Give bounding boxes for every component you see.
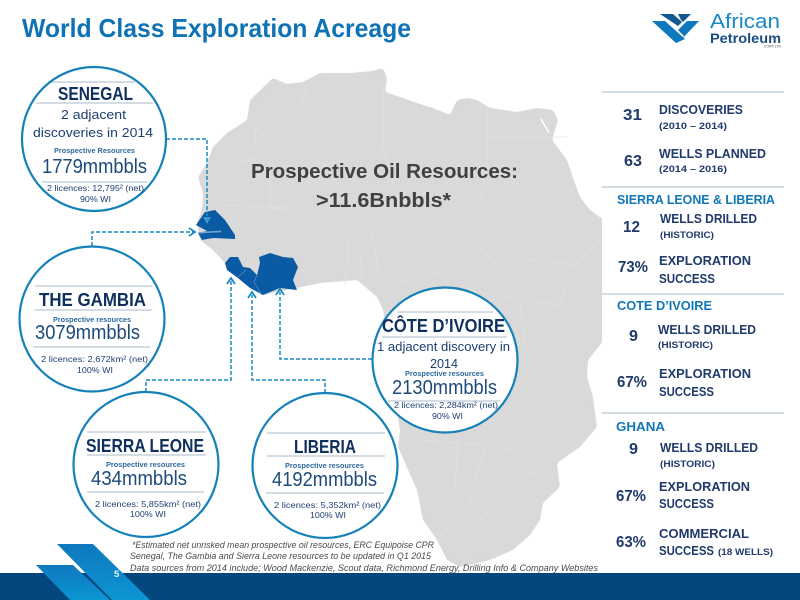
panel: The Gambia: 2 licences: 2,672km² (net) <box>41 354 148 364</box>
stat: Cote d'Ivoire wells drilled: 9 <box>629 328 638 345</box>
stat: Ghana wells drilled: WELLS DRILLED <box>660 440 758 455</box>
stat: Ghana exploration success: EXPLORATION <box>659 479 750 494</box>
panel: Cote d'Ivoire <box>372 288 518 432</box>
stat: Ghana commercial success: (18 WELLS) <box>718 547 773 558</box>
panel: Senegal: 1779mmbbls <box>42 156 147 178</box>
stat: Ghana wells drilled <box>629 440 758 470</box>
footnote: Data sources from 2014 include; Wood Mackenzie, Scout data, Richmond Energy, Drilling Info & Company Websites <box>130 563 599 573</box>
stat: Sierra Leone and Liberia wells drilled: 12 <box>623 219 640 236</box>
heading: Ghana: GHANA <box>616 419 666 434</box>
panel: Senegal: 90% WI <box>80 194 111 204</box>
headline: prospective oil resources: Prospective Oil Resources: <box>251 161 518 183</box>
stat: discoveries <box>623 102 743 132</box>
panel: Liberia: 4192mmbbls <box>272 469 377 491</box>
stat: Sierra Leone and Liberia wells drilled: WELLS DRILLED <box>660 211 757 226</box>
stat: Sierra Leone and Liberia wells drilled <box>623 211 757 241</box>
arrow: Senegal to map <box>166 139 211 224</box>
headline: prospective oil resources: >11.6Bnbbls* <box>316 190 451 212</box>
panel: Cote d'Ivoire: Prospective resources <box>405 369 484 378</box>
panel: The Gambia: 3079mmbbls <box>35 322 140 344</box>
stat: wells planned: (2014 – 2016) <box>659 164 727 175</box>
logo: African Petroleum: African <box>710 11 780 33</box>
panel: exploration statistics <box>602 60 800 573</box>
stat: discoveries: DISCOVERIES <box>659 102 743 117</box>
stat: Cote d'Ivoire exploration success <box>617 366 751 399</box>
panel: Liberia: LIBERIA <box>294 437 356 457</box>
panel: Sierra Leone: 2 licences: 5,855km² (net) <box>95 499 201 509</box>
stat: Cote d'Ivoire exploration success: 67% <box>617 374 647 391</box>
stat: Ghana wells drilled: 9 <box>629 441 638 458</box>
panel: Cote d'Ivoire: 90% WI <box>432 411 463 421</box>
stat: Ghana commercial success: SUCCESS <box>659 543 714 558</box>
stat: Ghana commercial success: 63% <box>616 534 646 551</box>
stat: Cote d'Ivoire exploration success: SUCCESS <box>659 384 714 399</box>
logo: African Petroleum: Petroleum <box>710 30 781 46</box>
panel: Cote d'Ivoire: 2 licences: 2,284km² (net) <box>394 400 498 410</box>
highlighted countries: Sierra Leone, Liberia, Cote d'Ivoire <box>225 253 298 295</box>
panel: The Gambia <box>20 246 164 392</box>
logo: African Petroleum: CORP LTD <box>764 44 781 48</box>
panel: Cote d'Ivoire: CÔTE D’IVOIRE <box>382 315 505 336</box>
stat: Sierra Leone and Liberia exploration success: SUCCESS <box>659 271 715 286</box>
footer band <box>0 544 800 600</box>
footnote: Senegal, The Gambia and Sierra Leone resources to be updated in Q1 2015 <box>130 551 432 561</box>
heading: Sierra Leone and Liberia: SIERRA LEONE & LIBERIA <box>617 192 776 207</box>
highlighted country: Senegal <box>196 210 235 240</box>
panel: The Gambia: THE GAMBIA <box>39 290 146 310</box>
stat: Ghana commercial success <box>616 526 773 558</box>
panel: Cote d'Ivoire: 2130mmbbls <box>392 377 497 399</box>
stat: Cote d'Ivoire wells drilled <box>629 322 756 351</box>
headline: prospective oil resources <box>251 161 518 212</box>
panel: The Gambia: 100% WI <box>77 365 113 375</box>
panel: Liberia: 100% WI <box>310 510 346 520</box>
panel: Senegal: Prospective Resources <box>54 146 135 155</box>
stat: Sierra Leone and Liberia exploration success <box>618 253 751 286</box>
panel: Cote d'Ivoire: 1 adjacent discovery in <box>377 339 510 354</box>
panel: Liberia: Prospective resources <box>285 461 364 470</box>
panel: Sierra Leone: Prospective resources <box>106 460 185 469</box>
panel: Sierra Leone: 100% WI <box>130 509 166 519</box>
stat: Sierra Leone and Liberia exploration success: EXPLORATION <box>659 253 751 268</box>
page number: 5 <box>114 569 120 580</box>
stat: Ghana wells drilled: (HISTORIC) <box>660 459 715 470</box>
stat: wells planned: WELLS PLANNED <box>659 146 766 161</box>
panel: Liberia <box>252 393 398 538</box>
arrow: Cote d'Ivoire to map <box>276 289 372 359</box>
stat: Sierra Leone and Liberia wells drilled: (HISTORIC) <box>660 230 714 241</box>
footnote: *Estimated net unrisked mean prospective oil resources, ERC Equipoise CPR <box>132 540 434 550</box>
stat: Ghana exploration success: 67% <box>616 488 646 505</box>
panel: Cote d'Ivoire: 2014 <box>430 356 458 371</box>
panel: The Gambia: Prospective resources <box>53 315 131 324</box>
panel: Senegal: discoveries in 2014 <box>33 125 153 140</box>
stat: Sierra Leone and Liberia exploration success: 73% <box>618 259 648 276</box>
stat: Ghana exploration success: SUCCESS <box>659 496 714 511</box>
stat: discoveries: (2010 – 2014) <box>659 121 727 132</box>
arrow: The Gambia to map <box>92 228 195 246</box>
stat: Ghana commercial success: COMMERCIAL <box>659 526 749 541</box>
panel: Senegal: SENEGAL <box>58 84 133 104</box>
arrow: Liberia to map <box>248 292 325 393</box>
stat: Cote d'Ivoire wells drilled: (HISTORIC) <box>658 340 713 351</box>
logo: African Petroleum <box>652 11 781 48</box>
map of Africa <box>197 68 604 567</box>
stat: Cote d'Ivoire exploration success: EXPLORATION <box>659 366 751 381</box>
heading: Cote d'Ivoire: COTE D’IVOIRE <box>617 298 712 313</box>
panel: Sierra Leone: SIERRA LEONE <box>86 436 204 456</box>
panel: Senegal: 2 licences: 12,795² (net) <box>47 183 144 193</box>
title: World Class Exploration Acreage <box>22 13 411 43</box>
panel: Sierra Leone <box>74 392 218 537</box>
stat: wells planned <box>624 146 766 175</box>
panel: Senegal <box>22 67 166 211</box>
footnote <box>130 540 599 573</box>
panel: Senegal: 2 adjacent <box>61 107 126 122</box>
stat: discoveries: 31 <box>623 107 642 124</box>
panel: Sierra Leone: 434mmbbls <box>91 468 187 490</box>
stat: Ghana exploration success <box>616 479 750 511</box>
stat: wells planned: 63 <box>624 153 642 170</box>
arrow: Sierra Leone to map <box>146 278 235 392</box>
stat: Cote d'Ivoire wells drilled: WELLS DRILLED <box>658 322 756 337</box>
panel: Liberia: 2 licences: 5,352km² (net) <box>274 500 381 510</box>
